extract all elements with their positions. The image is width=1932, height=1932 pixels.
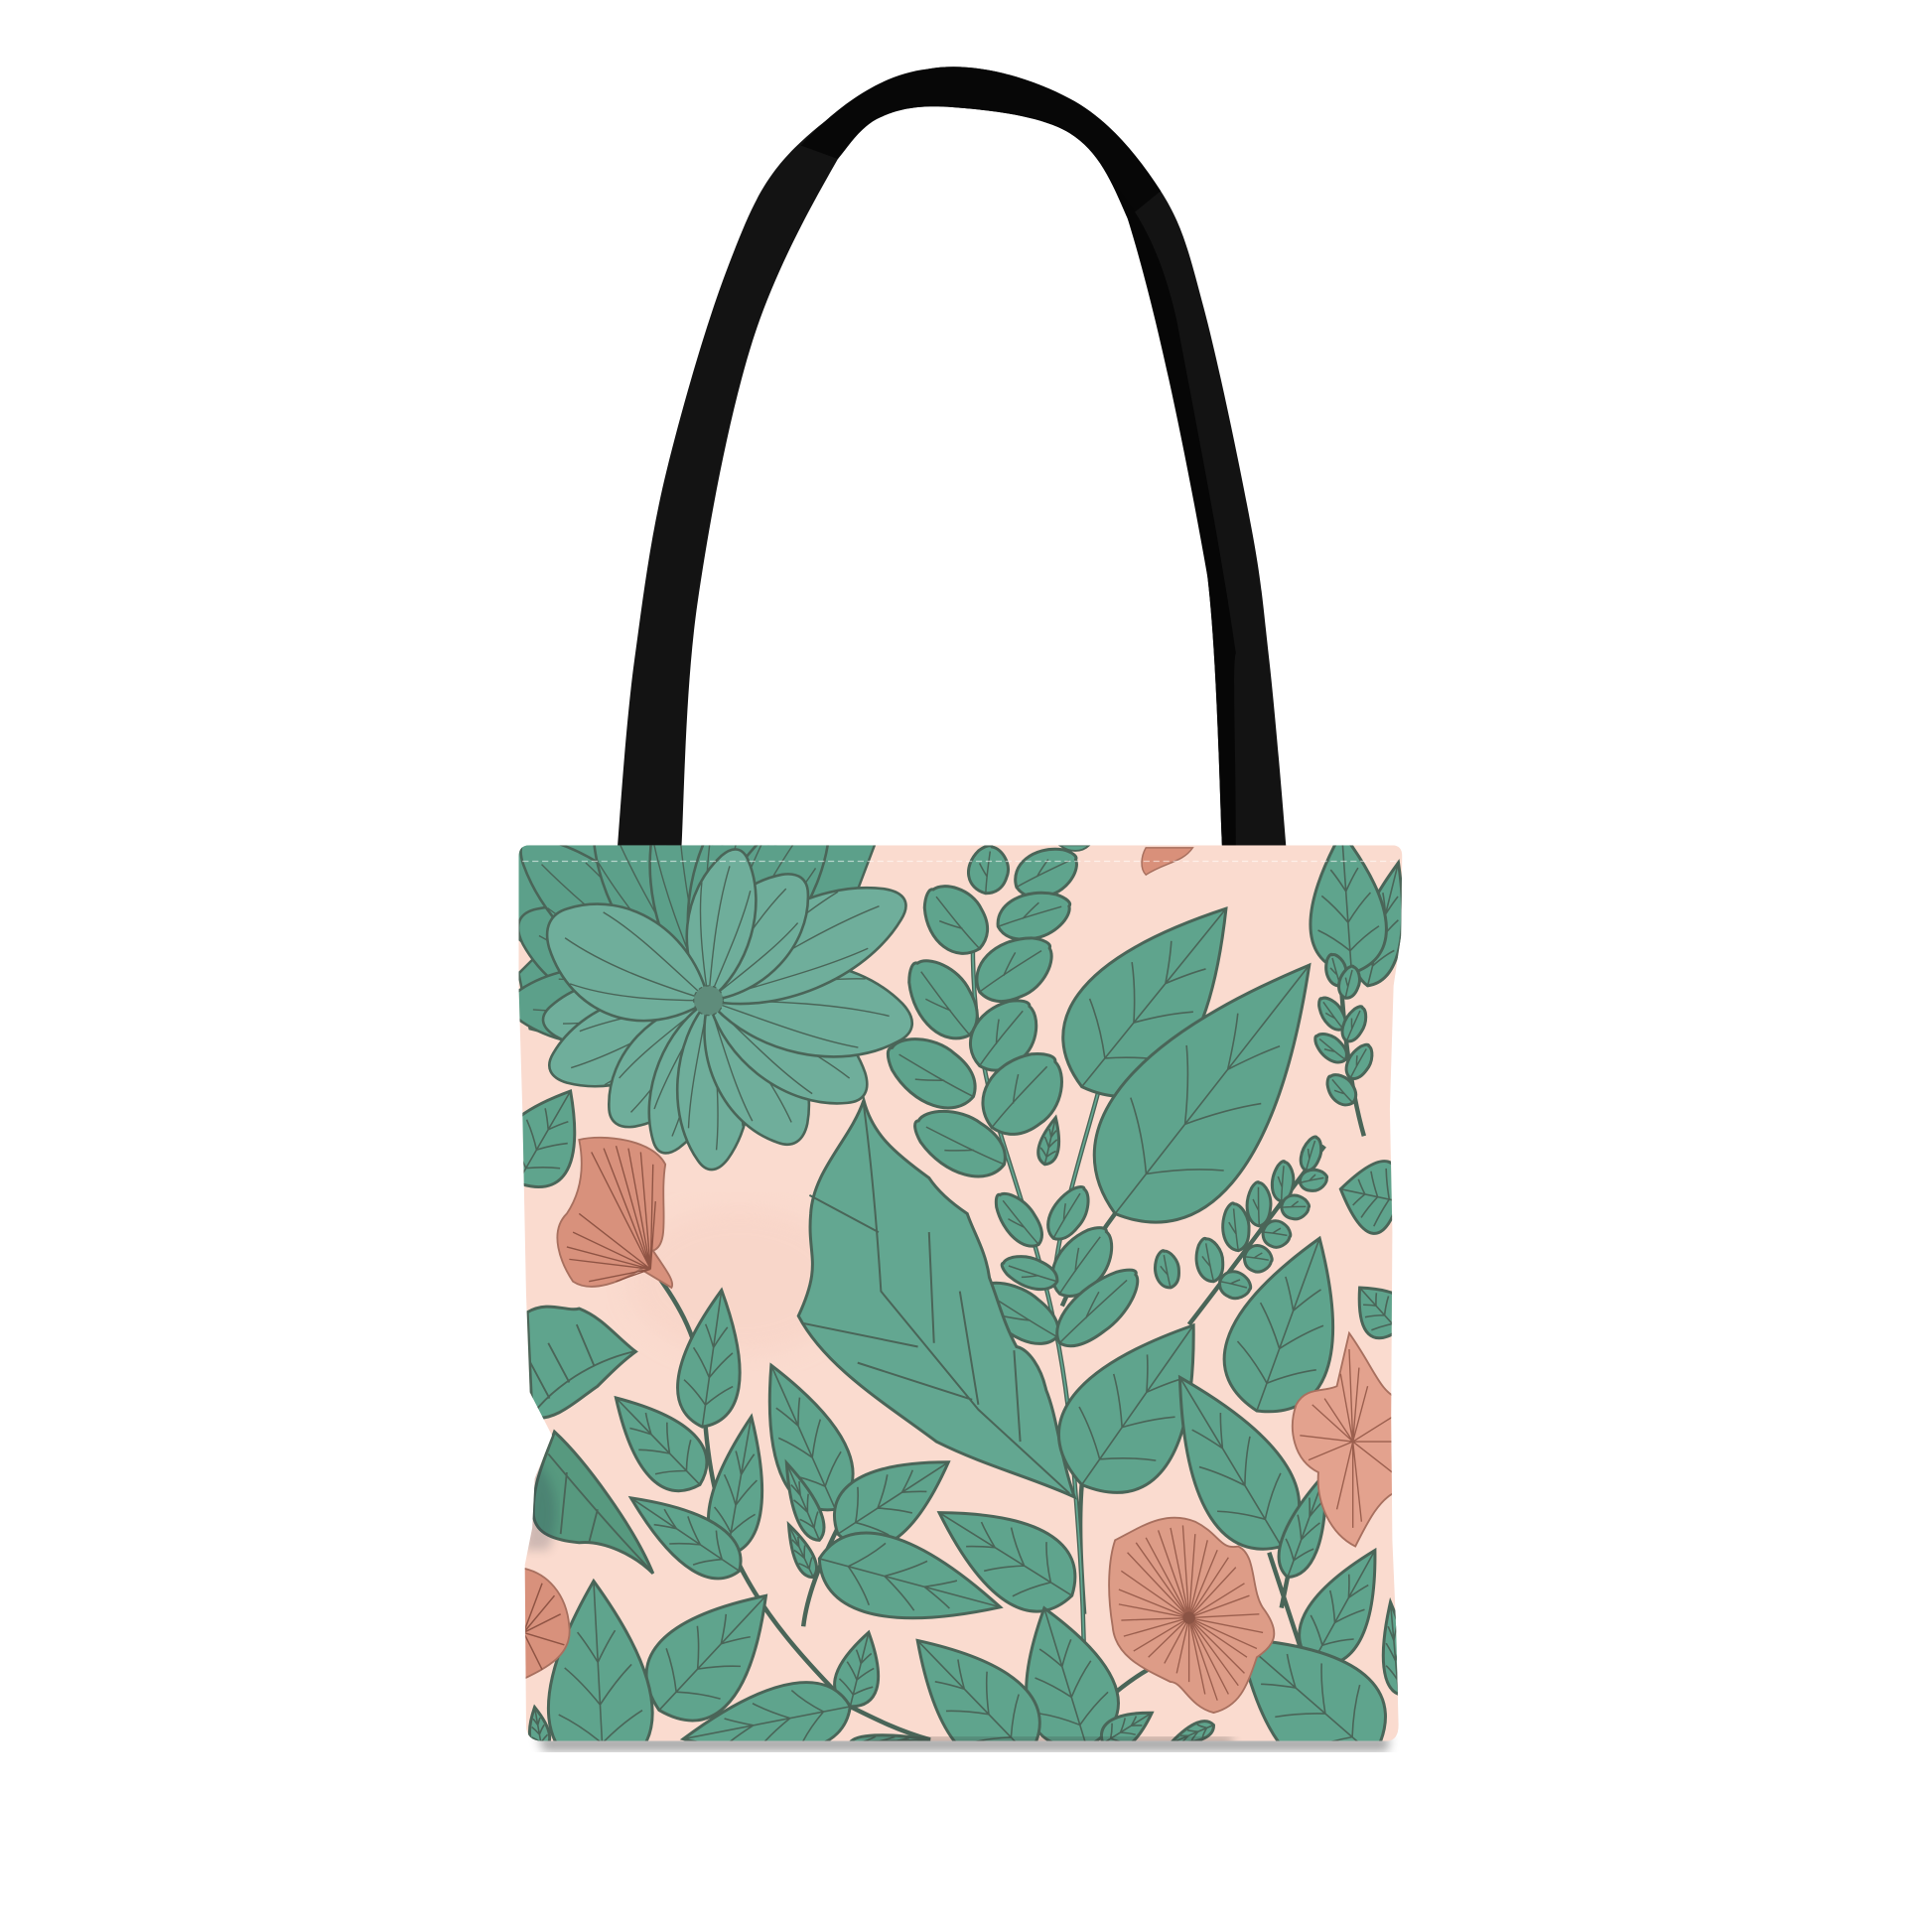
right small sprig	[1152, 1134, 1329, 1302]
huge central leaf	[798, 1100, 1074, 1497]
right side leaves	[1141, 829, 1419, 1696]
front petals	[525, 843, 922, 1171]
handle dark fold at top	[801, 67, 1161, 218]
lower left leaves	[485, 1073, 1011, 1777]
salmon flower: lower left	[524, 1568, 571, 1679]
salmon flower: upper left	[557, 1138, 672, 1288]
central sprig leaves	[886, 845, 1114, 1345]
salmon petal: top edge	[1142, 848, 1192, 875]
bag body: peach fabric with print	[518, 845, 1402, 1741]
lower central leaves	[850, 1269, 1215, 1741]
small top leaf fragment	[1059, 845, 1089, 851]
salmon flower: right	[1293, 1333, 1399, 1547]
handle dark inner band on right strap	[1115, 185, 1236, 850]
large upper leaves	[1061, 906, 1311, 1224]
back mass of petals	[511, 838, 878, 1041]
handle: black strap	[618, 67, 1287, 850]
big teal flower	[518, 845, 913, 1172]
upper left broad leaf	[527, 1307, 635, 1418]
bag bottom shadow	[537, 1737, 1390, 1751]
stems	[653, 905, 1364, 1739]
large bottom right leaf	[1249, 1640, 1387, 1741]
tote bag illustration	[518, 67, 1402, 1752]
left mid leaf	[533, 1432, 653, 1574]
back petals	[518, 845, 829, 1040]
salmon flower: center bottom	[1109, 1518, 1274, 1713]
bottom edge shade	[860, 1736, 1237, 1741]
top stitch line	[522, 861, 1400, 863]
fabric fold shading	[523, 1460, 556, 1550]
